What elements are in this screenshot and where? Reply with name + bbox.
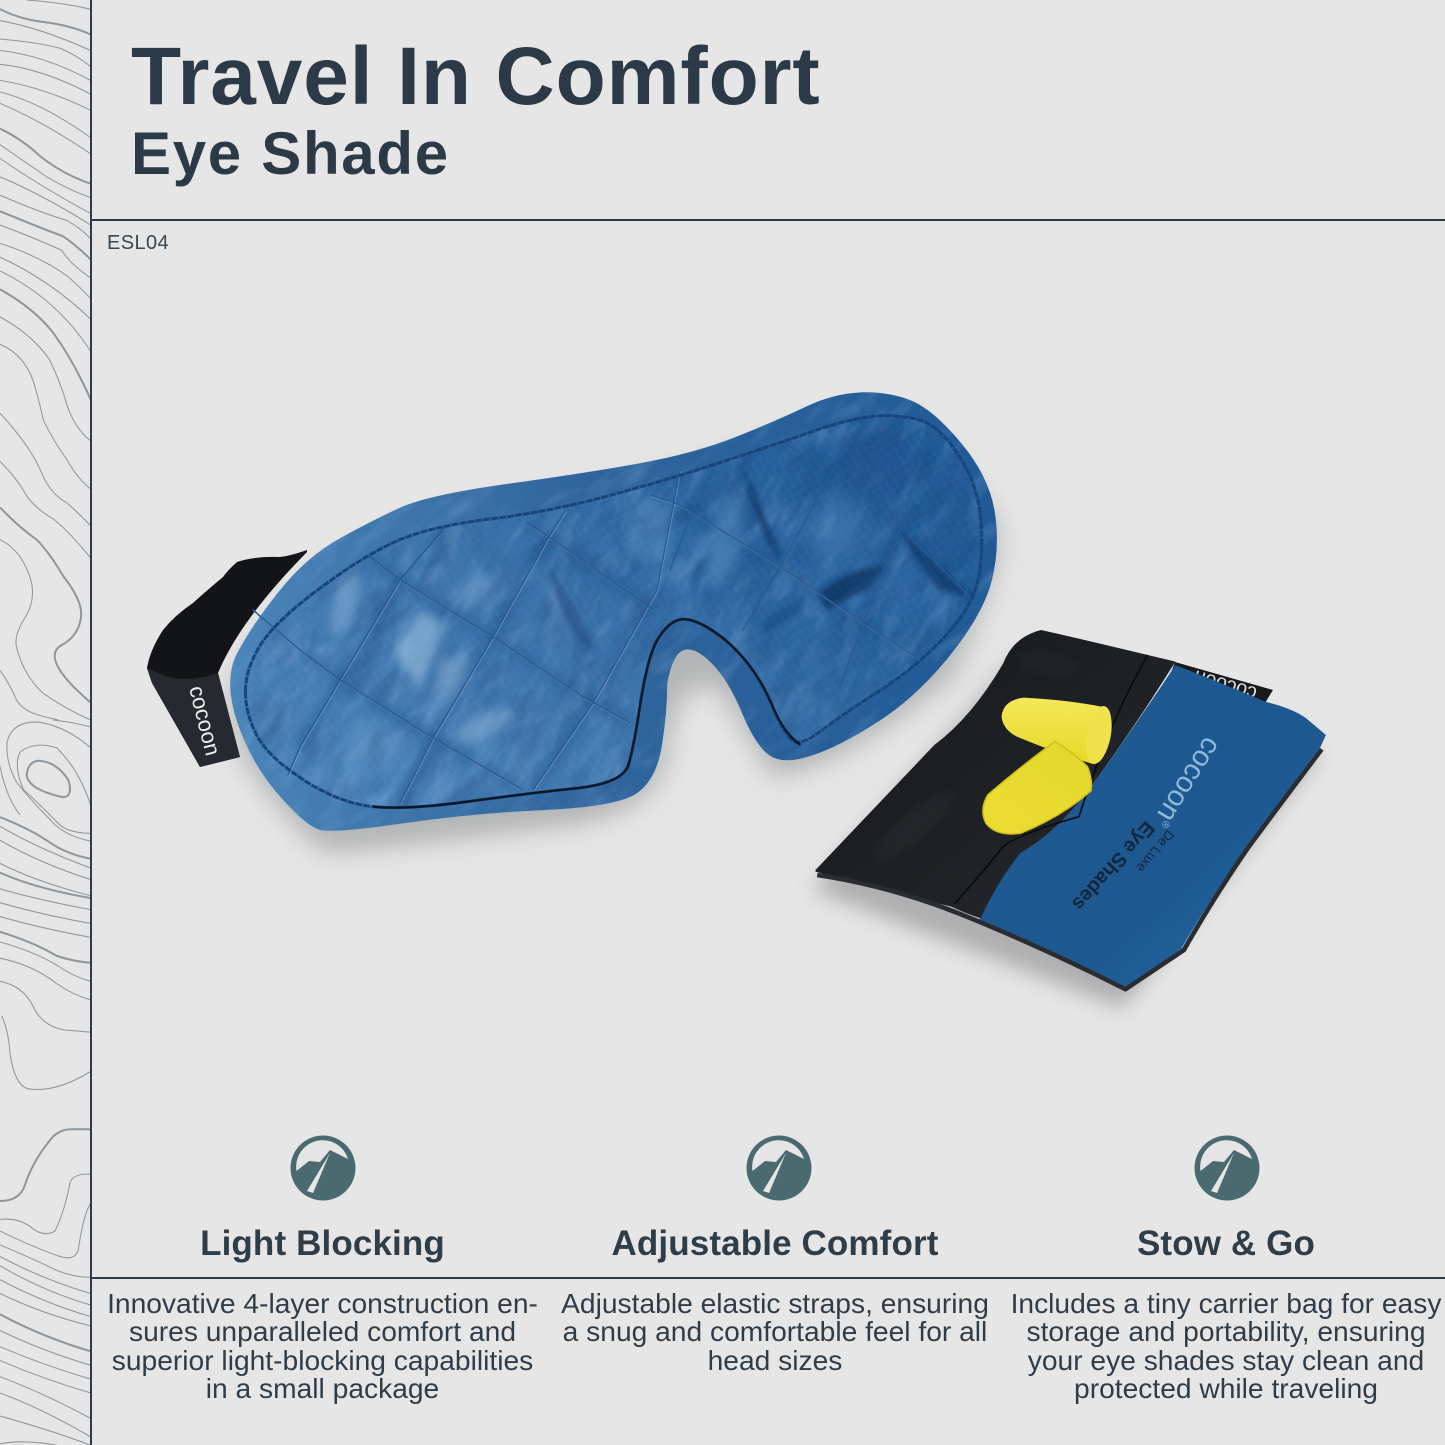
heading: stow and go: Stow & Go [1137,1224,1315,1263]
earplug one cut end [1082,704,1116,766]
sidebar: topographic contour lines [0,0,90,1445]
icon: mountain badge 3 [1194,1136,1260,1200]
text: stow and go description: protected while traveling [1074,1372,1378,1404]
mask rim [230,392,997,831]
perimeter seam [245,416,982,808]
text: light blocking description: in a small package [206,1372,439,1404]
horizontal rule under header [91,219,1445,221]
text: adjustable comfort description: a snug and comfortable feel for all [563,1315,987,1347]
ripstop weave [248,416,980,806]
black rear panel [815,630,1175,918]
strap woven label [147,668,240,767]
black fabric folds [866,646,1081,870]
rear tag [1172,662,1273,703]
text: light blocking description: Innovative 4-layer construction en- [107,1287,538,1319]
puff shading along quilting [300,433,973,803]
tag text fragment: cocoon [1191,665,1259,704]
icon: mountain badge 1 [290,1136,356,1200]
mask body [230,392,997,831]
quilting stitches [253,433,980,803]
quilted panel [245,416,982,808]
text: light blocking description [107,1287,538,1404]
highlights on left cells [325,488,749,780]
elastic strap [147,550,307,767]
fabric dark noise [249,416,980,806]
fabric streak noise [260,416,982,806]
pocket seam [955,655,1148,903]
earplug two [983,742,1091,834]
text: adjustable comfort description [561,1287,989,1376]
blue front pocket [979,665,1326,988]
text: light blocking description: sures unparalleled comfort and [129,1315,516,1347]
text: stow and go description: Includes a tiny carrier bag for easy [1011,1287,1441,1319]
pouch with earplugs [812,630,1326,1008]
text: adjustable comfort description: Adjustable elastic straps, ensuring [561,1287,989,1319]
fabric shading [248,416,982,806]
rim fabric noise [230,392,996,830]
vertical rule [90,0,92,1445]
text: stow and go description: storage and portability, ensuring [1026,1315,1426,1347]
text: adjustable comfort description: head sizes [708,1344,842,1376]
quilting stitch highlights [254,471,921,804]
text: light blocking description: superior light-blocking capabilities [112,1344,533,1376]
black piping at nose and lower edge [373,619,800,808]
mesh edge [817,749,1322,989]
title: Travel In Comfort [131,31,821,122]
pouch brand: cocoon [1151,731,1227,828]
horizontal rule above descriptions [91,1277,1445,1279]
dark folds [548,466,975,652]
heading: adjustable comfort: Adjustable Comfort [611,1224,939,1263]
pouch product name: Eye Shades [1067,817,1159,915]
icon: mountain badge 2 [746,1136,812,1200]
pouch shadow [812,657,1320,1008]
product photo: eye mask and pouch [147,392,1326,1198]
pouch brand: ® [1158,818,1172,831]
strap label text: cocoon [184,683,226,758]
text: stow and go description: your eye shades stay clean and [1028,1344,1424,1376]
pocket light edge [1182,748,1321,948]
mask shadow [232,419,997,852]
product code: ESL04 [107,232,169,254]
text: stow and go description [1011,1287,1442,1404]
subtitle: Eye Shade [131,120,450,187]
earplug one [1001,698,1112,764]
pouch product line: De Luxe [1133,827,1177,875]
heading: light blocking: Light Blocking [200,1224,445,1263]
eye mask [147,392,1010,863]
